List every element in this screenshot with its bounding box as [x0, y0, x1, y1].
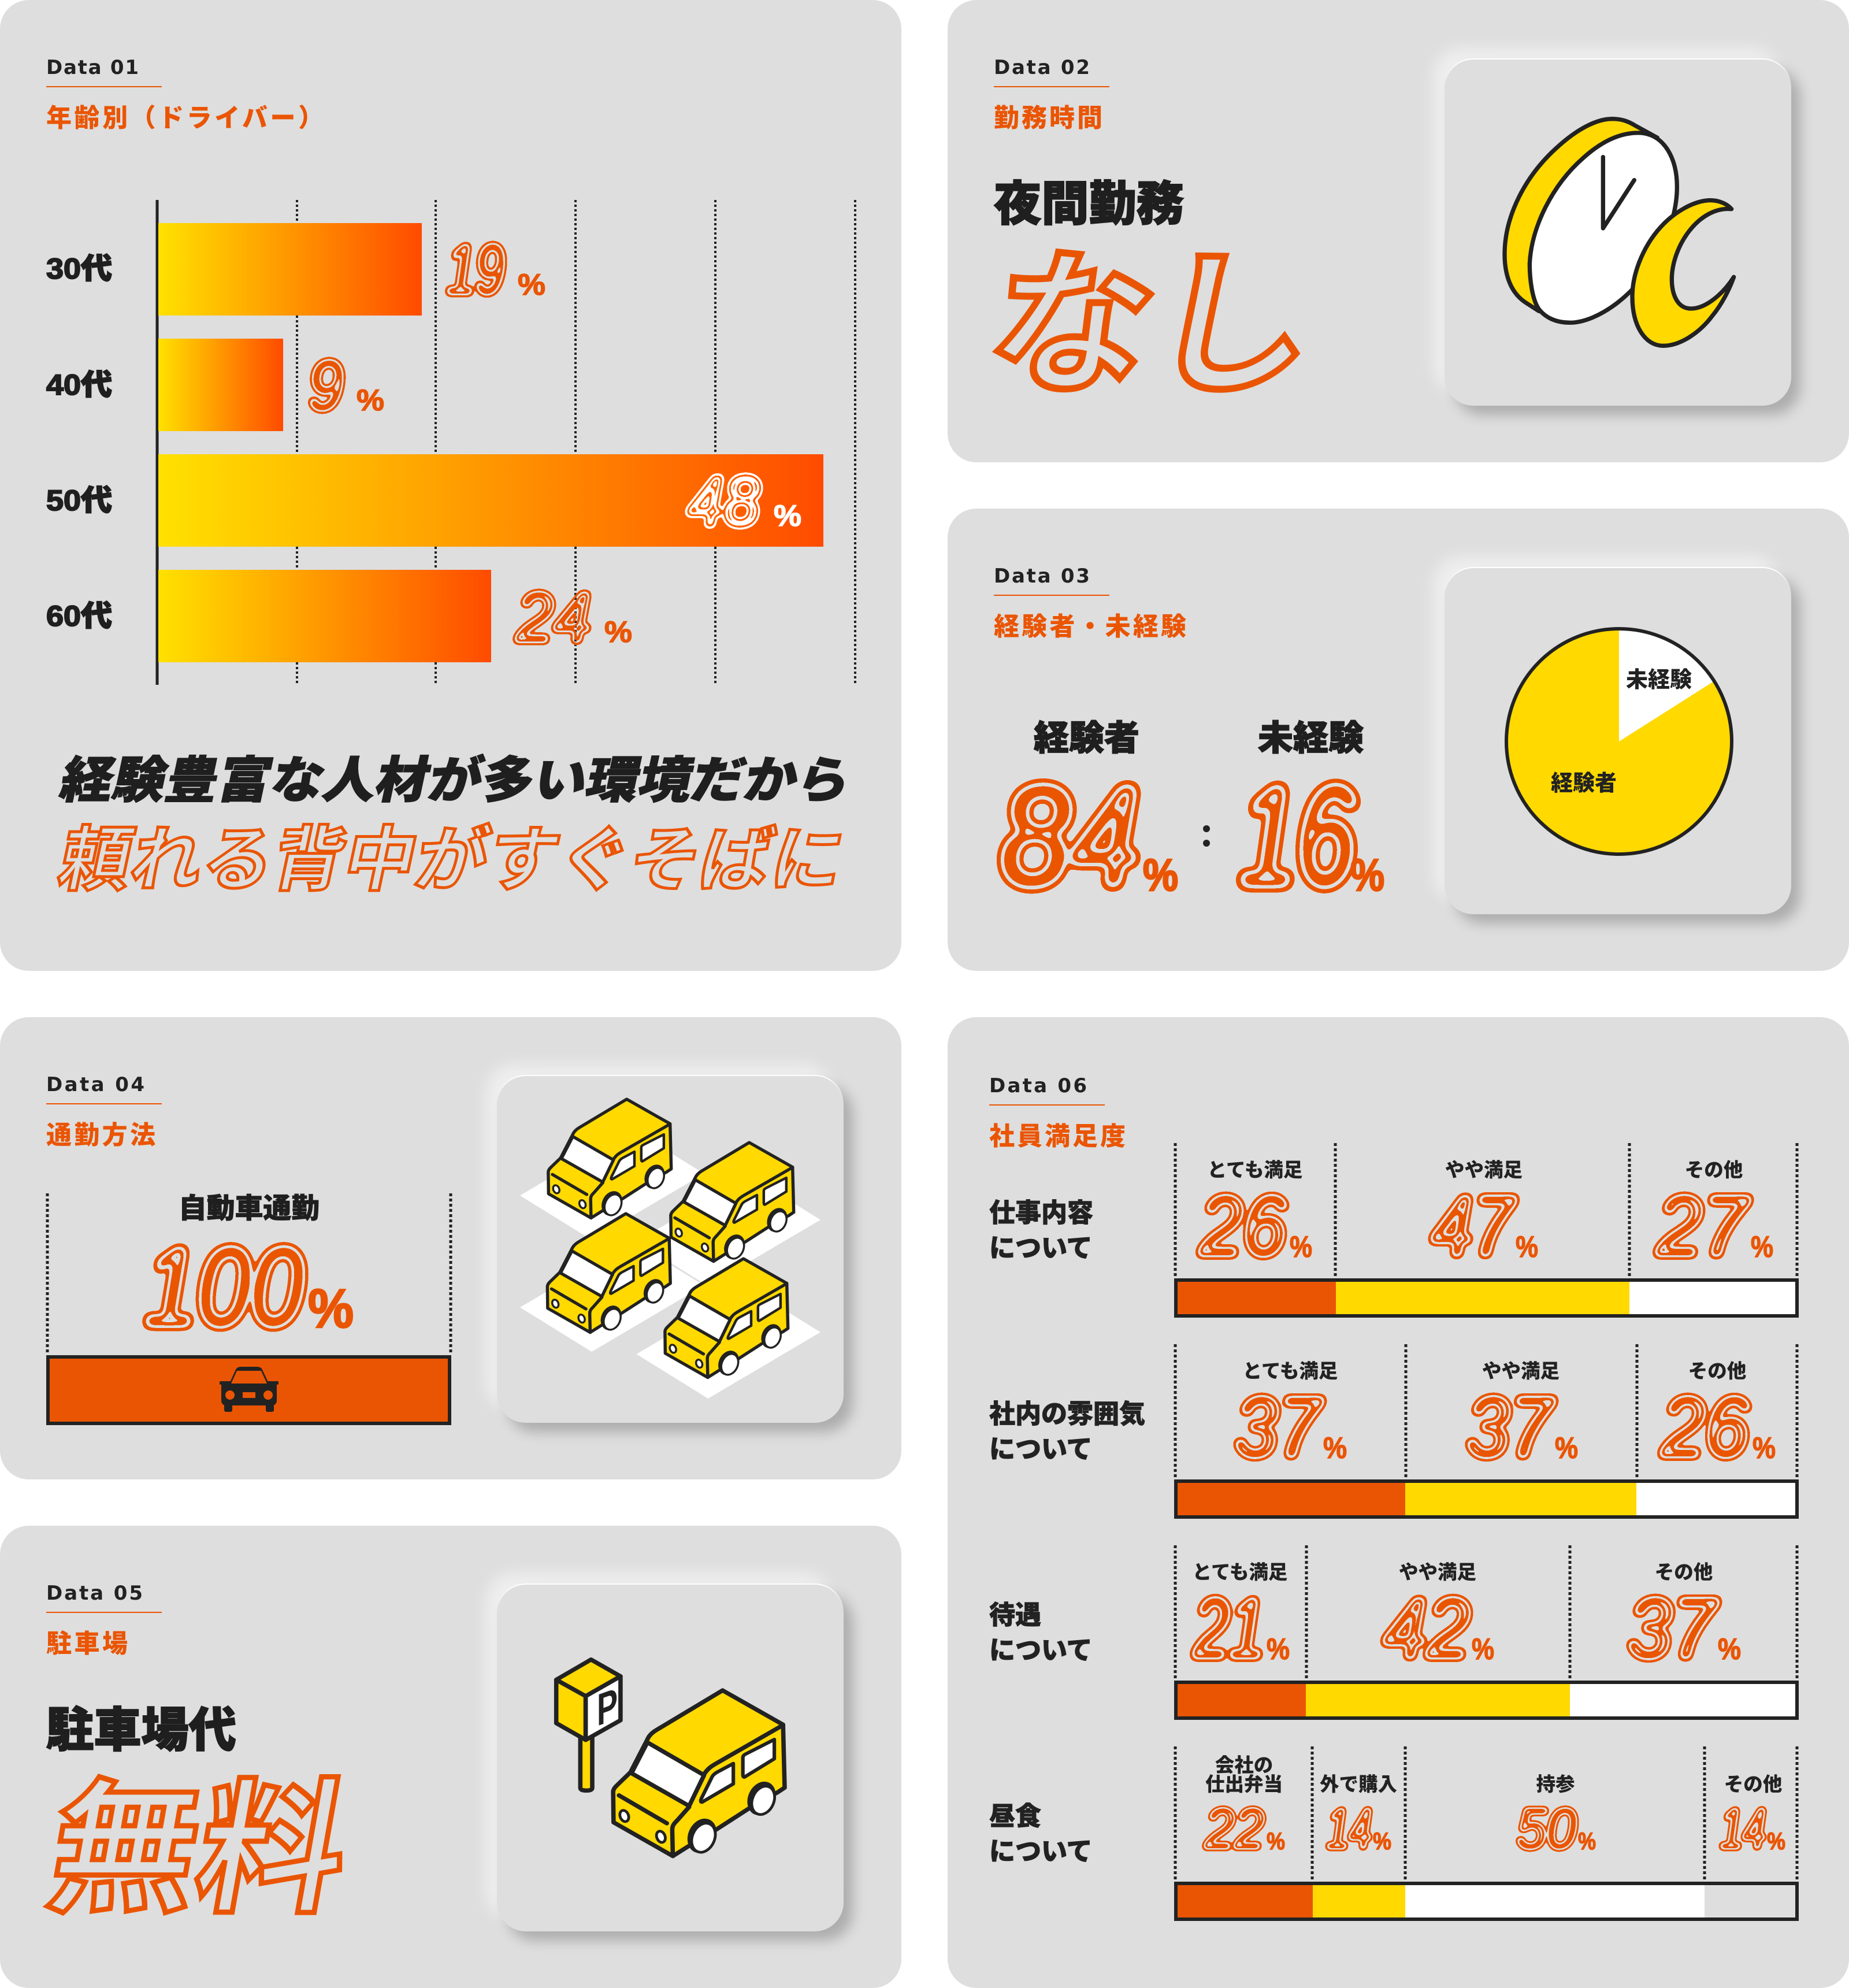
pie chart: 84 / 16	[1506, 629, 1732, 854]
pie chart: 84 / 16: 経験者	[1551, 772, 1617, 796]
row: 40s: %	[357, 384, 384, 417]
row: lunch: 50	[1517, 1797, 1576, 1860]
row: compensation: とても満足	[1193, 1562, 1287, 1583]
stat: inexperienced 16%: 16	[1239, 756, 1356, 915]
row: lunch: %	[1767, 1827, 1785, 1855]
row: workplace atmosphere: 37	[1235, 1380, 1324, 1475]
row: lunch: 外で購入	[1320, 1774, 1397, 1796]
card: pie chart	[1445, 568, 1791, 914]
row: workplace atmosphere: 37	[1466, 1380, 1555, 1475]
icon: parking sign	[556, 1660, 621, 1790]
row: lunch: 持参	[1536, 1774, 1575, 1796]
label: Data 06: Data 06	[989, 1074, 1087, 1097]
row: lunch: について	[989, 1837, 1093, 1866]
chart: car commute 100%: 自動車通勤	[179, 1193, 320, 1224]
row: job content	[989, 1143, 1797, 1316]
row: lunch: 会社の	[1215, 1755, 1273, 1776]
row: workplace atmosphere: %	[1555, 1431, 1578, 1465]
panel: Data 03 experience	[948, 509, 1849, 971]
row: job content: 26	[1199, 1179, 1286, 1274]
row: workplace atmosphere: %	[1323, 1431, 1347, 1465]
subheadline: 頼れる背中がすぐそばに	[52, 821, 852, 900]
row: 50s: 50代	[46, 484, 112, 517]
row: job content: について	[989, 1233, 1093, 1263]
row: 40s	[46, 339, 384, 431]
icon: van 2	[671, 1143, 794, 1262]
ratio colon	[1203, 825, 1210, 847]
chart: car commute 100%	[47, 1193, 451, 1423]
row: 60s: 60代	[46, 600, 112, 632]
text: free: 無料	[38, 1770, 361, 1931]
row: workplace atmosphere: 26	[1661, 1380, 1749, 1475]
row: compensation: 42	[1383, 1581, 1470, 1676]
icon: van	[613, 1690, 785, 1857]
label: Data 04: Data 04	[46, 1073, 144, 1096]
row: lunch: %	[1578, 1827, 1596, 1855]
row: compensation: 待遇	[989, 1600, 1041, 1630]
heading: experienced and inexperienced: 経験者・未経験	[994, 613, 1186, 641]
row: job content: 47	[1431, 1179, 1517, 1274]
row: compensation: その他	[1655, 1562, 1713, 1583]
stat: inexperienced 16%: %	[1350, 850, 1384, 900]
stat: inexperienced 16%: 未経験	[1258, 719, 1364, 758]
headline: 経験豊富な人材が多い環境だから	[55, 753, 856, 808]
label: Data 01: Data 01	[46, 56, 139, 79]
row: compensation: 21	[1193, 1581, 1265, 1676]
label: Data 03: Data 03	[994, 565, 1090, 588]
text: none: なし	[977, 240, 1330, 413]
row: job content: %	[1290, 1230, 1312, 1264]
chart: car commute 100%: %	[308, 1278, 354, 1340]
icon: van 4	[665, 1259, 788, 1378]
row: lunch: 仕出弁当	[1205, 1774, 1283, 1796]
panel: Data 04 commute	[0, 1017, 901, 1479]
row: workplace atmosphere: やや満足	[1482, 1361, 1560, 1382]
icon: car front	[220, 1367, 279, 1412]
row: workplace atmosphere	[989, 1344, 1797, 1517]
row: compensation: について	[989, 1635, 1093, 1665]
icon: van 3	[547, 1214, 670, 1333]
row: compensation: やや満足	[1399, 1562, 1476, 1583]
row: 60s: 24	[515, 578, 591, 657]
row: compensation: 37	[1628, 1581, 1719, 1676]
row: workplace atmosphere: %	[1753, 1431, 1776, 1465]
label: Data 05: Data 05	[46, 1582, 143, 1605]
heading: parking: 駐車場	[46, 1630, 128, 1658]
row: lunch: 14	[1327, 1797, 1372, 1860]
panel: Data 02 working hours	[948, 0, 1849, 462]
row: 50s	[46, 454, 823, 547]
row: job content: %	[1751, 1230, 1773, 1264]
row: 60s	[46, 570, 632, 662]
stat: experienced 84%: 84	[1001, 756, 1139, 915]
row: job content: とても満足	[1208, 1160, 1302, 1181]
row: lunch: その他	[1724, 1774, 1782, 1796]
icon: van 1	[548, 1099, 671, 1219]
panel: Data 06 employee satisfaction	[948, 1017, 1849, 1988]
row: lunch: 14	[1720, 1797, 1766, 1860]
row: compensation: %	[1472, 1633, 1494, 1666]
row: lunch: 昼食	[989, 1801, 1041, 1831]
row: 50s: 48	[688, 462, 760, 540]
row: workplace atmosphere: とても満足	[1243, 1361, 1338, 1382]
heading: age of drivers: 年齢別（ドライバー）	[46, 104, 324, 132]
row: job content: 仕事内容	[989, 1198, 1093, 1227]
panel: Data 05 parking	[0, 1526, 901, 1988]
row: 30s: 30代	[46, 253, 112, 285]
label: Data 02: Data 02	[994, 56, 1090, 79]
row: job content: %	[1516, 1230, 1538, 1264]
text: parking fee: 駐車場代	[46, 1704, 236, 1757]
row: 30s: 19	[447, 230, 504, 309]
row: job content: やや満足	[1445, 1160, 1523, 1181]
card: parking sign and van	[497, 1584, 844, 1931]
stat: experienced 84%: 経験者	[1034, 719, 1139, 758]
icon: parking sign: P	[597, 1678, 618, 1736]
row: 40s: 9	[309, 346, 343, 425]
row: lunch: %	[1267, 1827, 1285, 1855]
stat: experienced 84%: %	[1143, 850, 1178, 900]
row: 50s: %	[774, 499, 801, 533]
row: 30s: %	[518, 268, 545, 302]
row: 40s: 40代	[46, 369, 112, 401]
row: lunch	[989, 1746, 1797, 1919]
heading: commute method: 通勤方法	[46, 1121, 155, 1149]
bar chart: age distribution	[46, 200, 855, 685]
pie chart: 84 / 16: 未経験	[1626, 668, 1692, 692]
row: lunch: 22	[1204, 1797, 1264, 1860]
row: compensation: %	[1267, 1633, 1290, 1666]
row: job content: 27	[1656, 1179, 1751, 1274]
row: lunch: %	[1373, 1827, 1391, 1855]
heading: working hours: 勤務時間	[994, 104, 1102, 132]
row: compensation: %	[1718, 1633, 1741, 1666]
row: job content: その他	[1685, 1160, 1743, 1181]
card: parked vans	[497, 1075, 844, 1423]
heading: employee satisfaction: 社員満足度	[989, 1122, 1126, 1151]
row: workplace atmosphere: について	[989, 1434, 1093, 1464]
panel: Data 01 age of drivers	[0, 0, 901, 971]
card: clock illustration	[1445, 59, 1791, 406]
text: night shift: 夜間勤務	[994, 178, 1184, 231]
icon: clock and moon	[1505, 119, 1734, 346]
row: workplace atmosphere: その他	[1688, 1361, 1746, 1382]
parking spaces	[520, 1129, 820, 1399]
chart: car commute 100%: 100	[144, 1225, 303, 1349]
row: workplace atmosphere: 社内の雰囲気	[989, 1399, 1145, 1429]
row: compensation	[989, 1545, 1797, 1718]
row: 30s	[46, 223, 545, 316]
row: 60s: %	[604, 615, 632, 649]
